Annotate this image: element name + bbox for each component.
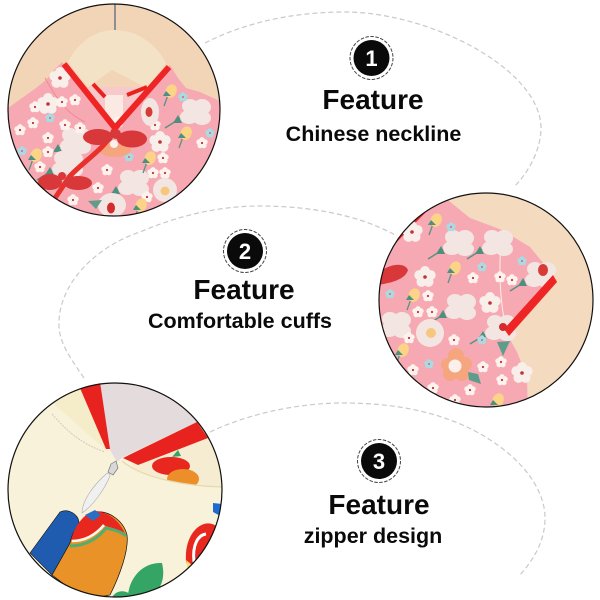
dashed arc: feature 2: [59, 206, 397, 378]
green leaves: [128, 563, 163, 598]
heading: Feature: Feature: [328, 489, 430, 520]
photo circle: Chinese neckline: [7, 3, 221, 217]
number badge 2: 2: [239, 239, 251, 264]
label: Chinese neckline: Chinese neckline: [286, 122, 461, 146]
label: zipper design: zipper design: [304, 524, 442, 548]
number badge 2: [224, 230, 266, 272]
blue shape: [30, 511, 79, 575]
feature 2 text block: [148, 230, 332, 333]
red placket: [64, 64, 169, 128]
heading: Feature: Feature: [322, 84, 424, 115]
inner print: [152, 457, 190, 475]
frog knots: [38, 129, 147, 190]
dashed arc: feature 1: [205, 12, 541, 186]
dashed arc: feature 3: [210, 403, 545, 575]
fabric print: [14, 67, 215, 220]
heading: Feature: Feature: [193, 274, 295, 305]
label: Comfortable cuffs: Comfortable cuffs: [148, 309, 332, 333]
feature 1 text block: [286, 36, 461, 146]
photo circle: comfortable cuffs: [378, 192, 594, 408]
front fold: [167, 481, 195, 489]
orange shape: [52, 512, 127, 600]
fabric print: [382, 213, 556, 406]
photo circle: zipper design: [0, 378, 232, 600]
candy print: [186, 523, 216, 564]
number badge 1: [350, 36, 393, 80]
number badge 3: 3: [373, 449, 385, 474]
feature 3 text block: [304, 440, 442, 548]
number badge 1: 1: [365, 46, 378, 71]
zipper pull: [108, 461, 118, 475]
